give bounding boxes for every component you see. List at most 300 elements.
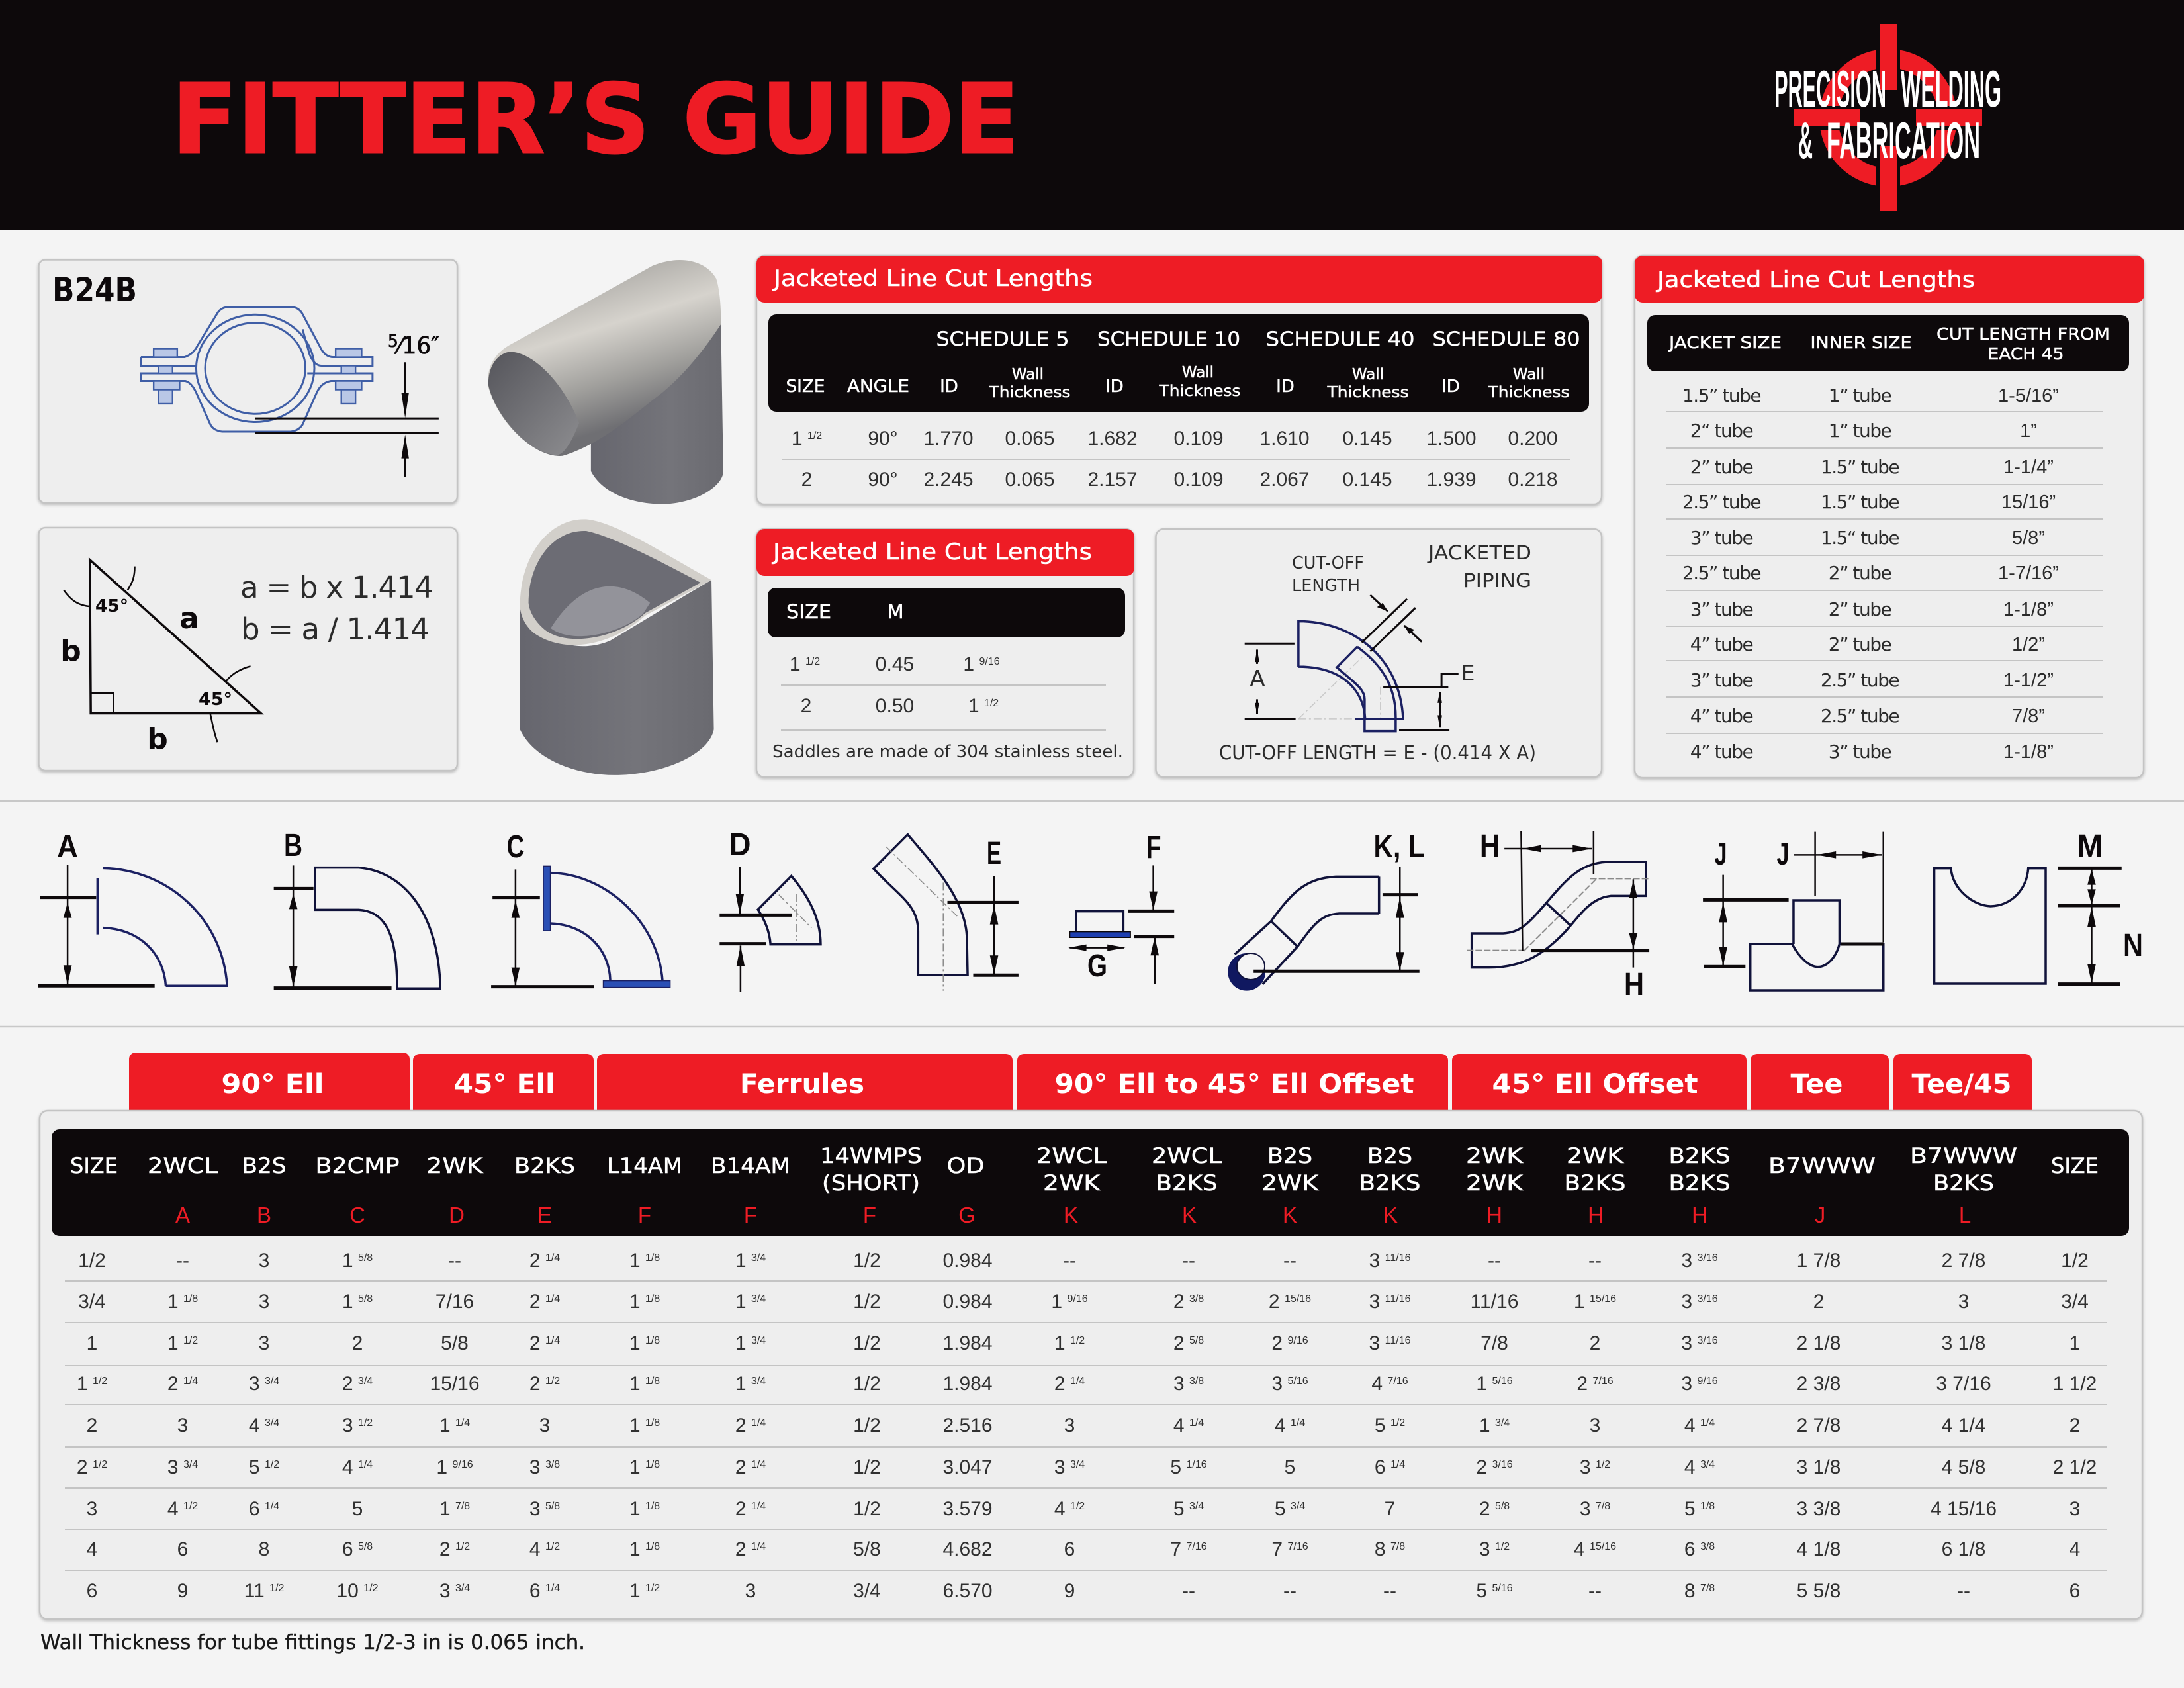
table rows: 7/8: [1480, 1333, 1508, 1354]
table rows: 8: [1375, 1538, 1386, 1560]
table rows: [782, 428, 1570, 491]
table rows: 2 7/8: [1797, 1415, 1841, 1436]
dimension letters row: K: [1064, 1203, 1078, 1227]
table rows: 4: [1173, 1415, 1185, 1436]
table rows: 1/2: [453, 1541, 470, 1552]
category tabs: 90° Ell: [221, 1069, 324, 1100]
table rows: 1.984: [942, 1333, 993, 1354]
table rows: 1/8: [180, 1293, 198, 1305]
table rows: 0.065: [1005, 428, 1055, 449]
table rows: 3: [1590, 1415, 1600, 1436]
table rows: 2 1/2: [2053, 1456, 2097, 1478]
table rows: 2: [1271, 1333, 1283, 1354]
table rows: 11/16: [1382, 1293, 1411, 1305]
table rows: 4 15/16: [1931, 1498, 1997, 1520]
diagram: E: [874, 835, 1019, 991]
table rows: 1/2: [180, 1335, 198, 1346]
table rows: 3/4: [748, 1335, 766, 1346]
table rows: 3: [259, 1250, 269, 1272]
title: FITTER’S GUIDE: [172, 64, 1019, 175]
dimension letters row: F: [863, 1203, 876, 1227]
panel labels: [1292, 541, 1531, 596]
table rows: 2” tube: [1690, 456, 1752, 478]
table rows: 3/4: [262, 1376, 279, 1387]
category tabs: Tee/45: [1911, 1069, 2012, 1100]
table rows: 2 7/8: [1942, 1250, 1985, 1272]
table rows: 5/8: [853, 1538, 881, 1560]
table rows: 1.5” tube: [1821, 491, 1899, 513]
table rows: 90°: [868, 469, 898, 491]
table header: L14AM: [607, 1153, 682, 1178]
table header: Thickness: [1487, 384, 1570, 401]
table header: 2WK: [1466, 1143, 1524, 1168]
table header: JACKET SIZE: [1668, 333, 1782, 352]
table rows: 7/8: [1592, 1501, 1610, 1512]
table rows: 1: [2070, 1333, 2080, 1354]
diagram: A: A: [57, 829, 78, 865]
table rows: 1.5” tube: [1821, 456, 1899, 478]
table header: B7WWW: [1768, 1153, 1876, 1178]
table rows: 1/8: [642, 1541, 660, 1552]
table rows: 0.065: [1005, 469, 1055, 491]
table header: CUT LENGTH FROM: [1936, 324, 2110, 344]
table header: B2KS: [1669, 1143, 1730, 1168]
dimension letters row: H: [1486, 1203, 1502, 1227]
dimension letters: E: [1461, 660, 1475, 686]
diagram: M, N: M: [2077, 829, 2103, 864]
table rows: 1: [963, 653, 974, 675]
table header: B2S: [1367, 1143, 1412, 1168]
dimension letters row: D: [449, 1203, 465, 1227]
table rows: 1.500: [1426, 428, 1477, 449]
table rows: --: [1063, 1250, 1076, 1272]
table rows: 1-1/8”: [2003, 599, 2054, 620]
table rows: 15/16: [1587, 1541, 1616, 1552]
table rows: 7/8: [1697, 1583, 1715, 1594]
table rows: 2: [1054, 1373, 1066, 1395]
dimension letters: [1250, 660, 1475, 692]
table rows: 2: [2070, 1415, 2080, 1436]
table rows: 2.245: [923, 469, 974, 491]
table rows: 1/4: [543, 1252, 560, 1264]
table rows: 2: [167, 1373, 179, 1395]
table rows: 2 3/8: [1797, 1373, 1841, 1395]
fitting diagrams row: [38, 827, 2143, 1002]
table rows: 4: [1275, 1415, 1285, 1436]
table rows: 3 7/16: [1936, 1373, 1991, 1395]
table rows: 5: [1275, 1498, 1285, 1520]
table rows: 3/4: [1067, 1459, 1085, 1470]
table rows: 1/8: [642, 1335, 660, 1346]
dimension letters row: K: [1283, 1203, 1297, 1227]
table rows: 4: [167, 1498, 179, 1520]
saddle note: Saddles are made of 304 stainless steel.: [772, 742, 1123, 762]
diagram: J: J: [1714, 837, 1727, 872]
table rows: 2: [439, 1538, 450, 1560]
diagram: F and G: G: [1087, 949, 1107, 984]
table rows: 2: [529, 1333, 540, 1354]
table rows: 3: [1369, 1250, 1380, 1272]
table rows: 15/16: [1282, 1293, 1311, 1305]
table rows: 7: [1170, 1538, 1181, 1560]
table rows: 1/2: [642, 1583, 660, 1594]
diagram: F and G: [1068, 830, 1174, 984]
table rows: 1: [167, 1291, 179, 1313]
table rows: 1.770: [923, 428, 974, 449]
table rows: 2: [1173, 1333, 1185, 1354]
category tabs: 45° Ell: [454, 1069, 555, 1100]
table rows: 3: [529, 1498, 540, 1520]
table rows: 9/16: [1285, 1335, 1308, 1346]
table rows: 1/2: [1067, 1335, 1085, 1346]
table rows: 1/2: [180, 1501, 198, 1512]
table rows: 3: [2070, 1498, 2080, 1520]
logo: PRECISION: [1774, 60, 1886, 118]
table rows: --: [1182, 1250, 1195, 1272]
table rows: 1/4: [262, 1501, 279, 1512]
table rows: 1: [1051, 1291, 1062, 1313]
table header: SIZE: [786, 377, 825, 397]
table rows: 2: [1576, 1373, 1588, 1395]
table rows: 1/2: [805, 430, 822, 442]
dimension letters row: K: [1383, 1203, 1398, 1227]
heading: B24B: B24B: [52, 271, 137, 309]
table rows: 6: [249, 1498, 259, 1520]
dimension letters: A: [1250, 666, 1265, 692]
table header: SCHEDULE 40: [1265, 328, 1415, 350]
table header: ANGLE: [847, 377, 909, 397]
diagram: A: [38, 829, 227, 986]
table rows: 3: [1580, 1498, 1591, 1520]
table rows: 6 1/8: [1942, 1538, 1985, 1560]
table rows: 15/16: [430, 1373, 480, 1395]
table rows: 1/2: [853, 1498, 881, 1520]
table rows: 2.157: [1087, 469, 1138, 491]
table rows: 1/4: [748, 1417, 766, 1429]
red heading bar: Jacketed Line Cut Lengths: [772, 265, 1093, 292]
table rows: 1/2: [853, 1415, 881, 1436]
panel labels: LENGTH: [1292, 576, 1360, 596]
table rows: 2: [801, 469, 812, 491]
table rows: 3/4: [748, 1252, 766, 1264]
table rows: 5/8: [441, 1333, 469, 1354]
table rows: 2.5” tube: [1682, 491, 1760, 513]
table rows: 1/2: [1492, 1541, 1510, 1552]
table rows: 2: [529, 1373, 540, 1395]
table rows: 3/4: [1697, 1459, 1715, 1470]
table rows: 4: [1574, 1538, 1585, 1560]
table header: (SHORT): [822, 1170, 920, 1196]
table rows: 1: [342, 1291, 353, 1313]
table rows: 0.218: [1508, 469, 1558, 491]
table rows: 1/4: [748, 1541, 766, 1552]
table header: B14AM: [711, 1153, 790, 1178]
table rows: 0.984: [942, 1291, 993, 1313]
table header: ID: [1441, 377, 1460, 397]
table rows: 3: [1681, 1250, 1692, 1272]
table rows: 1/8: [1697, 1501, 1715, 1512]
diagram: K, L: [1228, 829, 1424, 991]
table rows: 2: [352, 1333, 363, 1354]
table rows: 5/16: [1489, 1583, 1513, 1594]
triangle labels: [60, 596, 232, 756]
table header: SCHEDULE 10: [1097, 328, 1240, 350]
table rows: 3: [439, 1580, 450, 1602]
table rows: 1: [1054, 1333, 1066, 1354]
table rows: 1/2: [853, 1250, 881, 1272]
icon: 45 degree triangle: [64, 560, 261, 742]
table header: 2WK: [426, 1153, 484, 1178]
table rows: 5/16: [1489, 1376, 1513, 1387]
table rows: 1/2: [361, 1583, 379, 1594]
table rows: 4 1/8: [1797, 1538, 1841, 1560]
table header: Wall: [1012, 366, 1044, 383]
table rows: 2: [801, 695, 811, 717]
table rows: 2” tube: [1829, 598, 1891, 620]
table rows: 4: [529, 1538, 540, 1560]
table rows: 1/2: [853, 1456, 881, 1478]
table rows: 3/4: [853, 1580, 881, 1602]
table rows: 1: [629, 1373, 641, 1395]
table rows: 1.984: [942, 1373, 993, 1395]
table rows: 4.682: [942, 1538, 993, 1560]
table rows: 4: [1054, 1498, 1066, 1520]
table rows: 6: [87, 1580, 97, 1602]
logo: [1774, 24, 2001, 212]
table rows: 5: [1173, 1498, 1185, 1520]
red heading bar: Jacketed Line Cut Lengths: [772, 539, 1092, 565]
table rows: 1: [342, 1250, 353, 1272]
table rows: 3: [342, 1415, 353, 1436]
table rows: 4: [87, 1538, 97, 1560]
formula: CUT-OFF LENGTH = E - (0.414 X A): [1219, 741, 1536, 764]
diagram: C: C: [507, 829, 524, 865]
table header: ID: [940, 377, 958, 397]
diagram: F and G: F: [1146, 830, 1161, 865]
table rows: 3: [1681, 1291, 1692, 1313]
table rows: 9/16: [1064, 1293, 1088, 1305]
table rows: 1/2: [1067, 1501, 1085, 1512]
table rows: 2.5” tube: [1682, 562, 1760, 584]
table rows: 1: [735, 1250, 747, 1272]
red heading bar: [1635, 256, 2144, 303]
table rows: 1: [77, 1373, 87, 1395]
table rows: 1-5/16”: [1998, 385, 2059, 406]
table rows: 1: [629, 1580, 641, 1602]
table header: 2WK: [1466, 1170, 1524, 1196]
table rows: 0.145: [1342, 469, 1392, 491]
table rows: 1/4: [1067, 1376, 1085, 1387]
panel: Jacketed line cut lengths, tube sizes: [1635, 256, 2144, 778]
table rows: 1/8: [642, 1376, 660, 1387]
diagram: B: B: [284, 828, 302, 863]
table rows: 1: [1479, 1415, 1490, 1436]
category tabs: Ferrules: [740, 1069, 864, 1100]
table rows: 1/2: [1387, 1417, 1405, 1429]
table rows: 0.45: [876, 653, 914, 675]
table rows: 9: [1064, 1580, 1075, 1602]
table rows: 3” tube: [1690, 527, 1752, 549]
table rows: 1: [629, 1498, 641, 1520]
table rows: 1: [735, 1333, 747, 1354]
table header: ID: [1105, 377, 1124, 397]
table rows: 4: [1684, 1415, 1696, 1436]
table rows: 3/4: [180, 1459, 198, 1470]
table rows: 7/8”: [2012, 706, 2045, 727]
table header: Wall: [1513, 366, 1545, 383]
table rows: [65, 1250, 2107, 1602]
header band: WELDING: [1901, 60, 2001, 118]
panel labels: CUT-OFF: [1292, 553, 1364, 573]
table rows: 3” tube: [1690, 598, 1752, 620]
table header: [768, 588, 1125, 637]
table rows: 6: [529, 1580, 540, 1602]
diagram: E: E: [987, 836, 1001, 871]
table header: Wall: [1182, 364, 1214, 381]
table rows: --: [448, 1250, 461, 1272]
table rows: 4” tube: [1690, 633, 1752, 655]
table rows: 3: [1958, 1291, 1969, 1313]
table rows: 11/16: [1382, 1252, 1411, 1264]
table rows: 3 1/8: [1942, 1333, 1985, 1354]
table rows: --: [1957, 1580, 1970, 1602]
table rows: 3/8: [543, 1459, 560, 1470]
dimension letters row: H: [1588, 1203, 1604, 1227]
table header: B2KS: [1156, 1170, 1218, 1196]
category tabs: Tee: [1791, 1069, 1843, 1100]
table rows: 0.109: [1173, 428, 1224, 449]
table rows: 3: [529, 1456, 540, 1478]
table rows: 2: [1590, 1333, 1600, 1354]
table rows: 3: [249, 1373, 259, 1395]
triangle labels: 45°: [95, 596, 128, 616]
table header: B2KS: [1669, 1170, 1730, 1196]
table rows: 3: [539, 1415, 550, 1436]
table rows: 1/4: [543, 1293, 560, 1305]
table rows: 4: [249, 1415, 259, 1436]
table rows: 0.145: [1342, 428, 1392, 449]
table rows: 3/8: [1697, 1541, 1715, 1552]
category tabs: 90° Ell to 45° Ell Offset: [1055, 1069, 1414, 1100]
red heading bar: [756, 529, 1134, 576]
table rows: 15/16: [1587, 1293, 1616, 1305]
table rows: --: [1488, 1250, 1501, 1272]
table header: Thickness: [1158, 383, 1240, 400]
table header: B2S: [242, 1153, 286, 1178]
table rows: 3/16: [1489, 1459, 1513, 1470]
table rows: 3: [1681, 1373, 1692, 1395]
red heading bar: Jacketed Line Cut Lengths: [1656, 267, 1975, 293]
icon: stainless elbow photo: [488, 260, 723, 504]
table rows: 1/2: [853, 1333, 881, 1354]
table rows: 5: [249, 1456, 259, 1478]
table rows: 3/8: [1186, 1376, 1204, 1387]
table rows: 3: [1369, 1291, 1380, 1313]
panel: Jacketed line cut lengths, saddles: [756, 529, 1134, 777]
table rows: 15/16”: [2001, 492, 2056, 513]
table header: 2WCL: [1036, 1143, 1107, 1168]
table rows: 1/4: [1186, 1417, 1204, 1429]
table rows: 1” tube: [1829, 420, 1891, 442]
table rows: 1/2: [90, 1376, 107, 1387]
table rows: 2: [77, 1456, 87, 1478]
table rows: 1 1/2: [2053, 1373, 2097, 1395]
table rows: 1.682: [1087, 428, 1138, 449]
table rows: 3/4: [262, 1417, 279, 1429]
table header: [768, 314, 1589, 412]
table rows: 2: [1476, 1456, 1487, 1478]
table rows: --: [1588, 1250, 1602, 1272]
table rows: --: [1182, 1580, 1195, 1602]
table rows: 1.939: [1426, 469, 1477, 491]
table rows: 1/2: [2061, 1250, 2089, 1272]
table rows: 1: [436, 1456, 447, 1478]
table rows: 1: [439, 1415, 450, 1436]
table header: [52, 1129, 2129, 1236]
table rows: 2: [735, 1538, 747, 1560]
table rows: 4 1/4: [1942, 1415, 1985, 1436]
table rows: 5: [1170, 1456, 1181, 1478]
table rows: 3/16: [1694, 1293, 1718, 1305]
table rows: 1: [629, 1456, 641, 1478]
panel labels: JACKETED: [1427, 541, 1531, 564]
diagram: J: [1703, 832, 1884, 990]
dimension letters row: F: [744, 1203, 757, 1227]
table rows: 5/8”: [2012, 528, 2045, 549]
label: 5/16 inch: 5: [388, 332, 398, 352]
table rows: 3: [1580, 1456, 1591, 1478]
diagram: K, L: K, L: [1374, 829, 1424, 865]
table rows: 5/8: [1492, 1501, 1510, 1512]
diagram: H: H: [1480, 829, 1500, 864]
table rows: 1: [968, 695, 979, 717]
table rows: 1/8: [642, 1252, 660, 1264]
table rows: 7/8: [453, 1501, 470, 1512]
table rows: 1/2: [262, 1459, 279, 1470]
dimension letters row: H: [1692, 1203, 1707, 1227]
table rows: 7/16: [1385, 1376, 1408, 1387]
table header: M: [887, 600, 904, 623]
table rows: 2: [342, 1373, 353, 1395]
table rows: 1: [629, 1415, 641, 1436]
table rows: --: [1283, 1580, 1297, 1602]
table rows: 8: [259, 1538, 269, 1560]
table rows: 3.579: [942, 1498, 993, 1520]
table rows: 1: [629, 1333, 641, 1354]
table rows: 0.109: [1173, 469, 1224, 491]
table rows: 7/16: [1590, 1376, 1614, 1387]
table header: INNER SIZE: [1811, 333, 1911, 352]
table header: 2WCL: [148, 1153, 218, 1178]
panel labels: PIPING: [1463, 569, 1531, 592]
dimension letters row: C: [349, 1203, 365, 1227]
diagram: M, N: N: [2123, 928, 2143, 963]
table rows: 6: [177, 1538, 188, 1560]
table rows: 1/4: [543, 1335, 560, 1346]
table rows: 0.50: [876, 695, 914, 717]
table rows: 3/4: [1288, 1501, 1305, 1512]
table rows: 0.984: [942, 1250, 993, 1272]
table rows: 3/4: [2061, 1291, 2089, 1313]
table rows: 6: [1375, 1456, 1386, 1478]
table header: 2WK: [1567, 1143, 1624, 1168]
table rows: 9/16: [976, 656, 1000, 667]
table rows: 5/8: [1186, 1335, 1204, 1346]
table rows: 4: [1684, 1456, 1696, 1478]
table rows: 7/16: [1285, 1541, 1308, 1552]
table rows: 6: [1064, 1538, 1075, 1560]
table rows: 9/16: [449, 1459, 473, 1470]
